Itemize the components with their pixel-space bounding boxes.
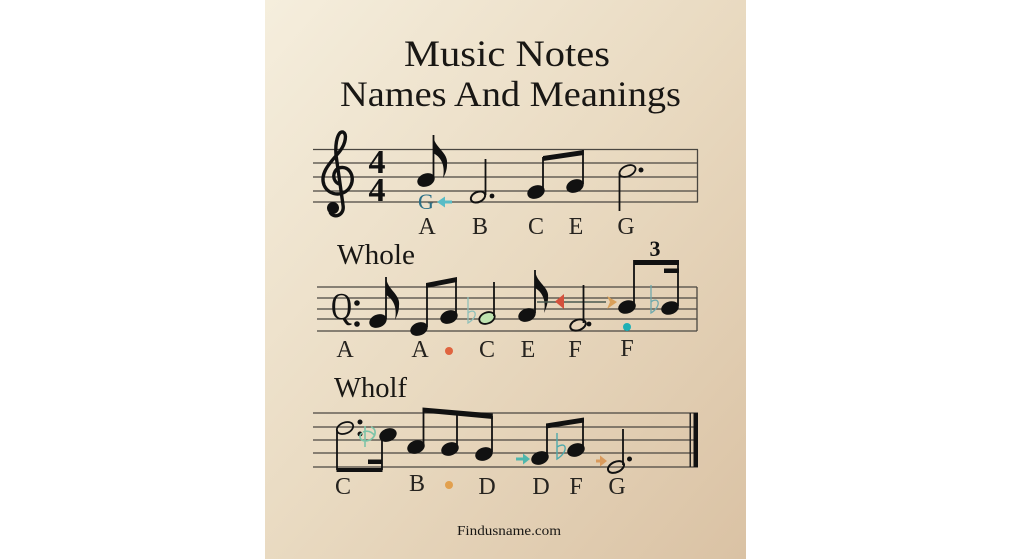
heading: Wholf: Wholf	[334, 372, 407, 404]
note labels: A	[418, 214, 436, 240]
orange arrow	[596, 456, 607, 466]
note labels: F	[569, 474, 583, 500]
time signature	[368, 144, 386, 209]
note labels: D	[478, 474, 496, 500]
Q clef label: Q	[331, 286, 352, 328]
staff 3	[313, 408, 698, 500]
triplet beamed notes	[616, 236, 681, 317]
teal flat	[651, 285, 658, 313]
title: Music Notes	[404, 34, 610, 75]
eighth note	[367, 277, 399, 330]
footer website: Findusname.com	[457, 524, 561, 539]
note labels	[418, 214, 635, 240]
note labels: G	[608, 474, 626, 500]
note labels: C	[528, 214, 544, 240]
note labels	[336, 336, 634, 363]
final barline	[690, 413, 698, 467]
time signature: 4	[368, 172, 386, 209]
note labels: E	[569, 214, 583, 240]
note labels: C	[479, 337, 495, 363]
beamed eighth notes	[408, 277, 460, 338]
heading: Whole: Whole	[337, 239, 415, 271]
dotted half note stem down	[618, 163, 644, 211]
note labels: F	[620, 336, 634, 362]
teal arrow	[516, 454, 530, 464]
teal flat	[468, 297, 475, 323]
note labels: D	[532, 474, 550, 500]
beamed three notes	[405, 408, 495, 463]
title: Names And Meanings	[340, 74, 681, 114]
teal G with arrow	[418, 189, 452, 214]
title	[340, 34, 681, 114]
staff 1	[313, 132, 698, 240]
staff 2	[317, 236, 697, 363]
eighth note	[516, 270, 548, 324]
panel: parchment background	[265, 0, 746, 559]
note labels: G	[617, 214, 635, 240]
beamed eighth notes	[525, 150, 586, 201]
teal dot	[623, 323, 631, 331]
time signature: 4	[368, 144, 386, 181]
note labels: A	[336, 337, 354, 363]
half note with sixteenth beam	[335, 420, 399, 472]
triplet beamed notes: 3	[650, 236, 660, 261]
dotted half note	[606, 429, 632, 475]
teal flat	[557, 433, 565, 459]
note labels	[335, 471, 626, 500]
teal flat overlay	[360, 426, 375, 447]
beamed pair	[529, 418, 587, 467]
eighth note	[415, 135, 447, 189]
green half note	[478, 282, 496, 326]
note labels: B	[409, 471, 425, 497]
dotted half note	[469, 159, 494, 205]
note labels: B	[472, 214, 488, 240]
note labels: C	[335, 474, 351, 500]
note labels: F	[568, 337, 582, 363]
teal G with arrow: G	[418, 189, 434, 214]
dotted half note	[569, 285, 591, 333]
note labels: A	[411, 337, 429, 363]
coloured arrows on line	[537, 294, 617, 309]
note labels: E	[521, 337, 535, 363]
icon: treble clef	[323, 132, 352, 216]
